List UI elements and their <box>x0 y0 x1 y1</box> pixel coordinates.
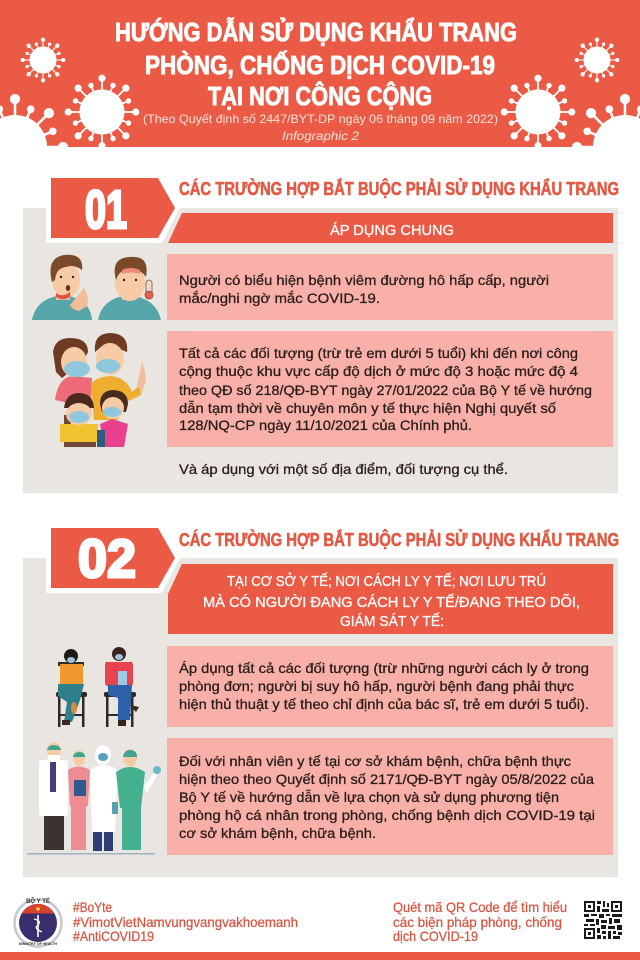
subtitle: (Theo Quyết định số 2447/BYT-DP ngày 06 tháng 09 năm 2022) <box>143 112 498 126</box>
icon: seated people <box>56 647 139 727</box>
icon: ministry of health logo: BỘ Y TẾ <box>26 897 50 905</box>
subheading bar: medical facilities: GIÁM SÁT Y TẾ: <box>340 613 444 630</box>
subheading bar: general: ÁP DỤNG CHUNG <box>330 222 454 239</box>
icon: ministry of health logo: MINISTRY OF HEALTH <box>19 942 58 946</box>
footer bar <box>0 952 640 960</box>
subheading bar: medical facilities: TẠI CƠ SỞ Y TẾ; NƠI CÁCH LY Y TẾ; NƠI LƯU TRÚ <box>227 572 546 590</box>
panel text: medical staff: hiện theo theo Quyết định số 2171/QĐ-BYT ngày 05/8/2022 của <box>179 771 594 787</box>
panel text: medical staff: Đối với nhân viên y tế tại cơ sở khám bệnh, chữa bệnh thực <box>179 753 571 769</box>
subheading bar: medical facilities <box>168 564 613 634</box>
panel: section 01 <box>23 178 619 493</box>
title <box>115 16 517 111</box>
icon: ministry of health logo <box>14 897 62 946</box>
panel text: all subjects except <box>167 646 613 727</box>
icon: QR code <box>584 901 622 939</box>
hashtags <box>73 899 298 944</box>
panel text: all subjects: theo QĐ số 218/QĐ-BYT ngày 27/01/2022 của Bộ Y tế về hướng <box>179 382 592 398</box>
infographic number: Infographic 2 <box>282 129 359 143</box>
panel text: all subjects: 128/NQ-CP ngày 11/10/2021 của Chính phủ. <box>179 417 472 433</box>
badge 02 <box>51 528 175 589</box>
QR prompt text: Quét mã QR Code để tìm hiểu <box>393 899 567 915</box>
icon: virus cluster right <box>501 38 640 200</box>
icon: sick people <box>32 255 161 320</box>
header banner <box>0 0 640 200</box>
footer <box>0 897 640 960</box>
panel text: all subjects except: Áp dụng tất cả các đối tượng (trừ những người cách ly ở trong <box>179 660 589 676</box>
hashtags: #BoYte <box>73 899 112 915</box>
panel text: all subjects except: hiện thủ thuật y tế theo chỉ định của bác sĩ, trẻ em dưới 5 tuổi). <box>179 696 589 712</box>
panel text: medical staff: phòng hộ cá nhân trong phòng, chống bệnh dịch COVID-19 tại <box>179 807 595 823</box>
QR prompt text: các biện pháp phòng, chống <box>393 914 562 930</box>
QR prompt text <box>393 899 567 944</box>
title: HƯỚNG DẪN SỬ DỤNG KHẨU TRANG <box>115 16 517 47</box>
hashtags: #VimotVietNamvungvangvakhoemanh <box>73 914 298 930</box>
panel text: all subjects <box>167 331 613 447</box>
panel text: all subjects: Tất cả các đối tượng (trừ trẻ em dưới 5 tuổi) khi đến nơi công <box>179 345 578 361</box>
subheading bar: general <box>168 213 613 243</box>
badge 02: 02 <box>78 529 136 589</box>
panel text: medical staff <box>167 738 613 855</box>
panel: section 02 <box>23 528 619 877</box>
panel text: all subjects: cộng thuộc khu vực cấp độ dịch ở mức độ 3 hoặc mức độ 4 <box>179 363 578 379</box>
icon: virus cluster left <box>0 38 139 200</box>
note text: Và áp dụng với một số địa điểm, đối tượng cụ thể. <box>179 461 508 477</box>
panel text: all subjects except: phòng đơn; người bị suy hô hấp, người bệnh đang phải thực <box>179 678 574 694</box>
hashtags: #AntiCOVID19 <box>73 928 154 944</box>
subheading bar: medical facilities: MÀ CÓ NGƯỜI ĐANG CÁCH LY Y TẾ/ĐANG THEO DÕI, <box>203 594 580 611</box>
panel text: all subjects: dẫn tạm thời về chuyên môn y tế thực hiện Nghị quyết số <box>179 400 556 416</box>
panel text: medical staff: Bộ Y tế về hướng dẫn về lựa chọn và sử dụng phương tiện <box>179 789 559 805</box>
icon: family wearing masks <box>53 333 146 447</box>
title: TẠI NƠI CÔNG CỘNG <box>208 81 432 111</box>
panel text: symptoms: mắc/nghi ngờ mắc COVID-19. <box>179 290 380 306</box>
panel text: medical staff: cơ sở khám bệnh, chữa bệnh. <box>179 825 376 841</box>
icon: medical staff <box>27 742 161 854</box>
panel text: symptoms <box>167 254 613 320</box>
QR prompt text: dịch COVID-19 <box>393 928 478 944</box>
badge 01: 01 <box>85 180 127 240</box>
badge 01 <box>51 178 175 240</box>
title: PHÒNG, CHỐNG DỊCH COVID-19 <box>145 50 495 80</box>
panel text: symptoms: Người có biểu hiện bệnh viêm đường hô hấp cấp, người <box>179 272 549 288</box>
